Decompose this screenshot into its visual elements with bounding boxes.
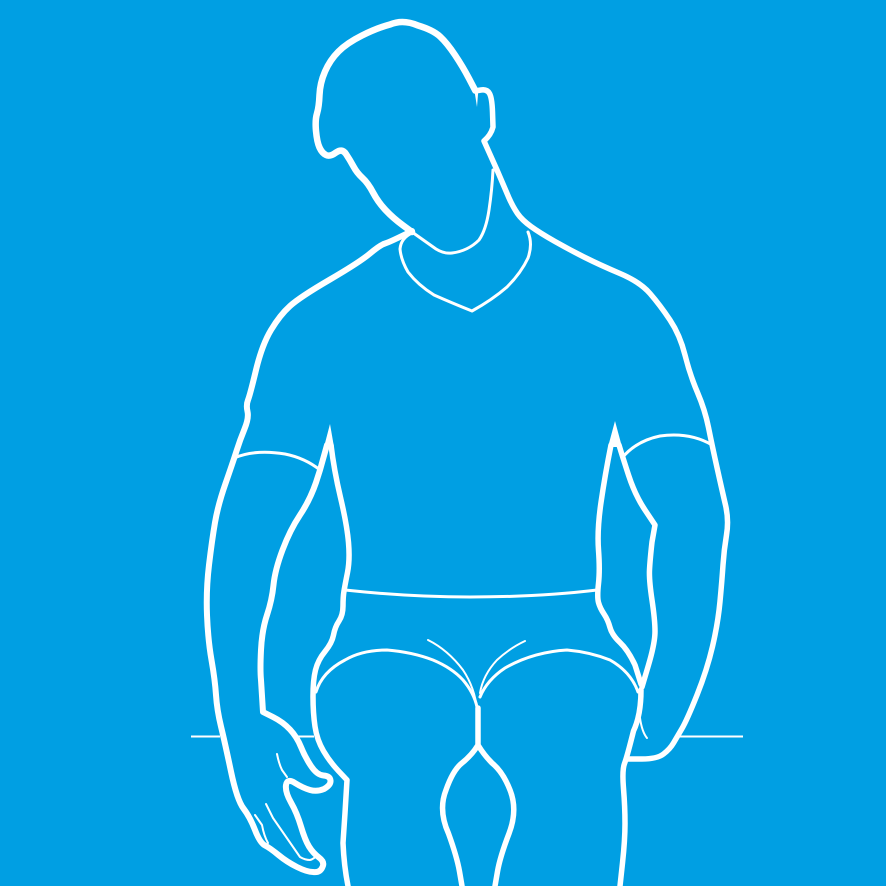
right torso side and hip	[598, 445, 641, 684]
inner thigh gap	[443, 708, 514, 886]
fine detail lines	[234, 170, 712, 707]
left torso side, hip and leg	[313, 445, 349, 886]
head outline	[316, 22, 475, 232]
tapered crease lines	[255, 640, 647, 860]
ear tip of the head line	[474, 88, 478, 107]
left hand finger creases	[255, 754, 317, 860]
armpit tips	[324, 88, 622, 447]
chin and jaw	[412, 170, 493, 253]
right knee and leg	[620, 690, 641, 886]
right sleeve hem	[622, 435, 712, 458]
figure outline	[207, 22, 728, 886]
right hand thumb tip	[640, 718, 647, 738]
left shoulder, arm and hand	[207, 231, 412, 872]
left thigh curve	[316, 650, 477, 707]
left groin crease	[428, 640, 477, 710]
bench line	[191, 736, 743, 738]
inner right arm	[619, 445, 655, 687]
right groin crease	[480, 641, 525, 693]
shirt waist hem	[345, 590, 597, 597]
right thigh curve	[480, 650, 638, 697]
left sleeve hem	[234, 452, 320, 470]
shirt collar	[400, 232, 530, 311]
ear, neck, right shoulder and outer right arm	[475, 90, 728, 759]
